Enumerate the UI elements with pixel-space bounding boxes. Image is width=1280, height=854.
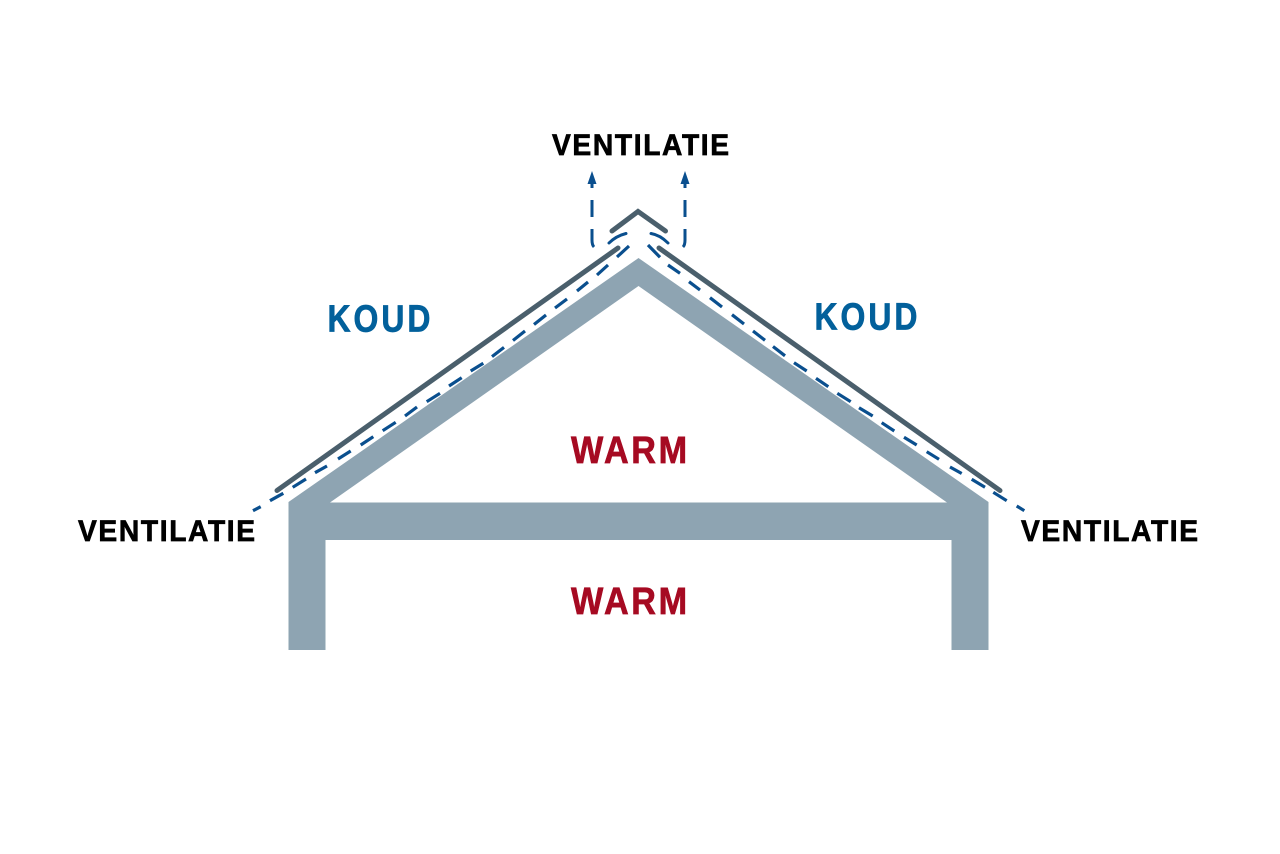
label: warm room: WARM xyxy=(571,579,687,622)
label: left ventilation: VENTILATIE xyxy=(78,515,255,548)
right ridge airflow curve xyxy=(651,234,668,243)
left roof panel xyxy=(277,248,618,490)
house structure: walls, rafters and floor beam xyxy=(288,258,988,650)
right ventilation airflow dashed line xyxy=(648,245,1024,511)
right outflow arrow xyxy=(680,171,690,247)
label: right ventilation: VENTILATIE xyxy=(1021,515,1198,548)
label: warm attic: WARM xyxy=(571,428,687,471)
label: top ventilation: VENTILATIE xyxy=(552,129,729,162)
ridge cap xyxy=(612,212,666,231)
left ventilation airflow dashed line xyxy=(253,246,629,511)
left outflow arrow xyxy=(588,171,596,247)
label: cold left: KOUD xyxy=(328,298,430,340)
left ridge airflow curve xyxy=(609,234,626,243)
right roof panel xyxy=(659,248,1000,490)
label: cold right: KOUD xyxy=(814,296,917,338)
